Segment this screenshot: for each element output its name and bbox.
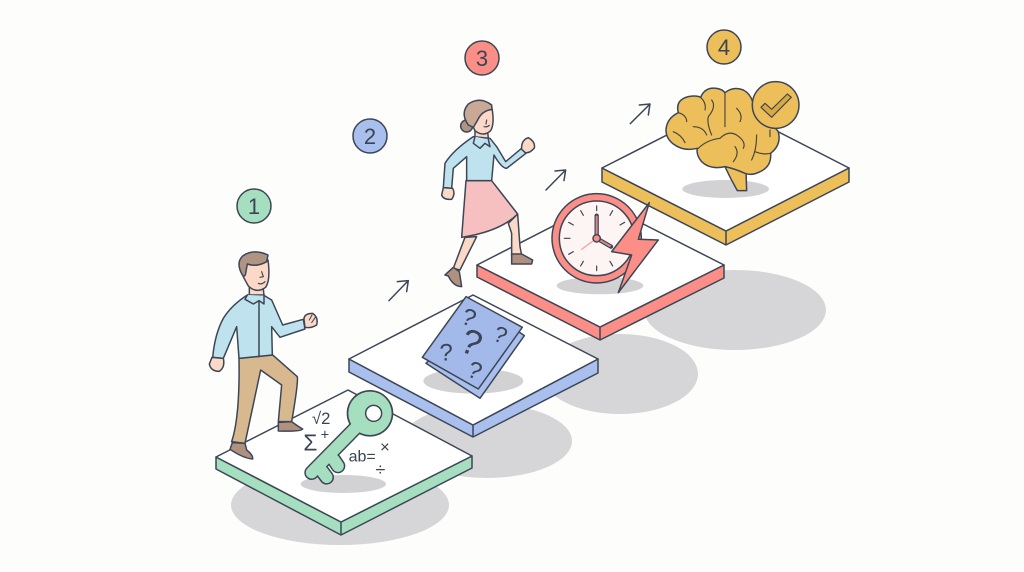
badge 1 <box>237 189 271 223</box>
legs <box>453 214 522 270</box>
math symbols: + <box>321 427 329 443</box>
question marks: ? <box>455 321 488 365</box>
platform 4: yellow <box>602 105 849 245</box>
clock <box>552 194 641 283</box>
brain with check badge <box>666 82 799 198</box>
arrow 3 <box>630 104 650 124</box>
ground shadows <box>231 270 826 545</box>
badge 3: 3 <box>476 46 488 71</box>
skirt <box>462 181 518 237</box>
question marks: ? <box>463 356 486 386</box>
neck <box>475 128 488 145</box>
neck <box>249 283 264 301</box>
heels <box>445 254 533 287</box>
math symbols: ab= <box>349 449 376 466</box>
man walking <box>209 252 317 459</box>
badge 4 <box>707 30 741 64</box>
badge 3 <box>465 41 499 75</box>
key <box>312 390 393 477</box>
face <box>470 107 493 134</box>
clock with lightning bolt <box>552 194 658 294</box>
math symbols: ÷ <box>375 459 385 479</box>
platform 2: blue <box>349 295 598 437</box>
math symbols: √2 <box>312 409 330 428</box>
check badge <box>752 82 799 128</box>
question marks: ? <box>439 340 453 367</box>
woman walking <box>442 100 535 287</box>
arrow 2 <box>546 170 566 190</box>
question marks <box>439 303 511 386</box>
platform 3: red <box>477 202 724 340</box>
badge 2 <box>353 119 387 153</box>
arrow 1 <box>389 281 408 301</box>
hair <box>239 252 268 277</box>
shirt <box>213 295 305 358</box>
brain stem <box>725 167 747 191</box>
hands <box>442 138 535 199</box>
cards shadow <box>423 368 523 394</box>
hands <box>209 313 317 371</box>
key shadow <box>301 475 386 493</box>
trousers <box>232 355 297 443</box>
question marks: ? <box>457 303 480 333</box>
badge 1: 1 <box>248 194 260 219</box>
brain shadow <box>682 180 769 198</box>
question cards <box>422 297 524 398</box>
math symbols: × <box>380 438 390 457</box>
shoes <box>230 422 303 459</box>
brain <box>666 88 779 174</box>
question marks: ? <box>490 320 511 349</box>
platform 1: green <box>216 390 472 535</box>
blouse <box>443 137 526 188</box>
clock shadow <box>557 277 643 294</box>
face <box>243 260 269 290</box>
key with math symbols <box>301 390 393 493</box>
badge 2: 2 <box>364 124 376 149</box>
badge 4: 4 <box>718 35 730 60</box>
hair bun <box>461 120 473 132</box>
hair <box>464 100 492 127</box>
math symbols <box>303 409 390 479</box>
brain folds <box>673 93 771 162</box>
math symbols: Σ <box>303 430 317 456</box>
lightning bolt <box>612 203 658 293</box>
